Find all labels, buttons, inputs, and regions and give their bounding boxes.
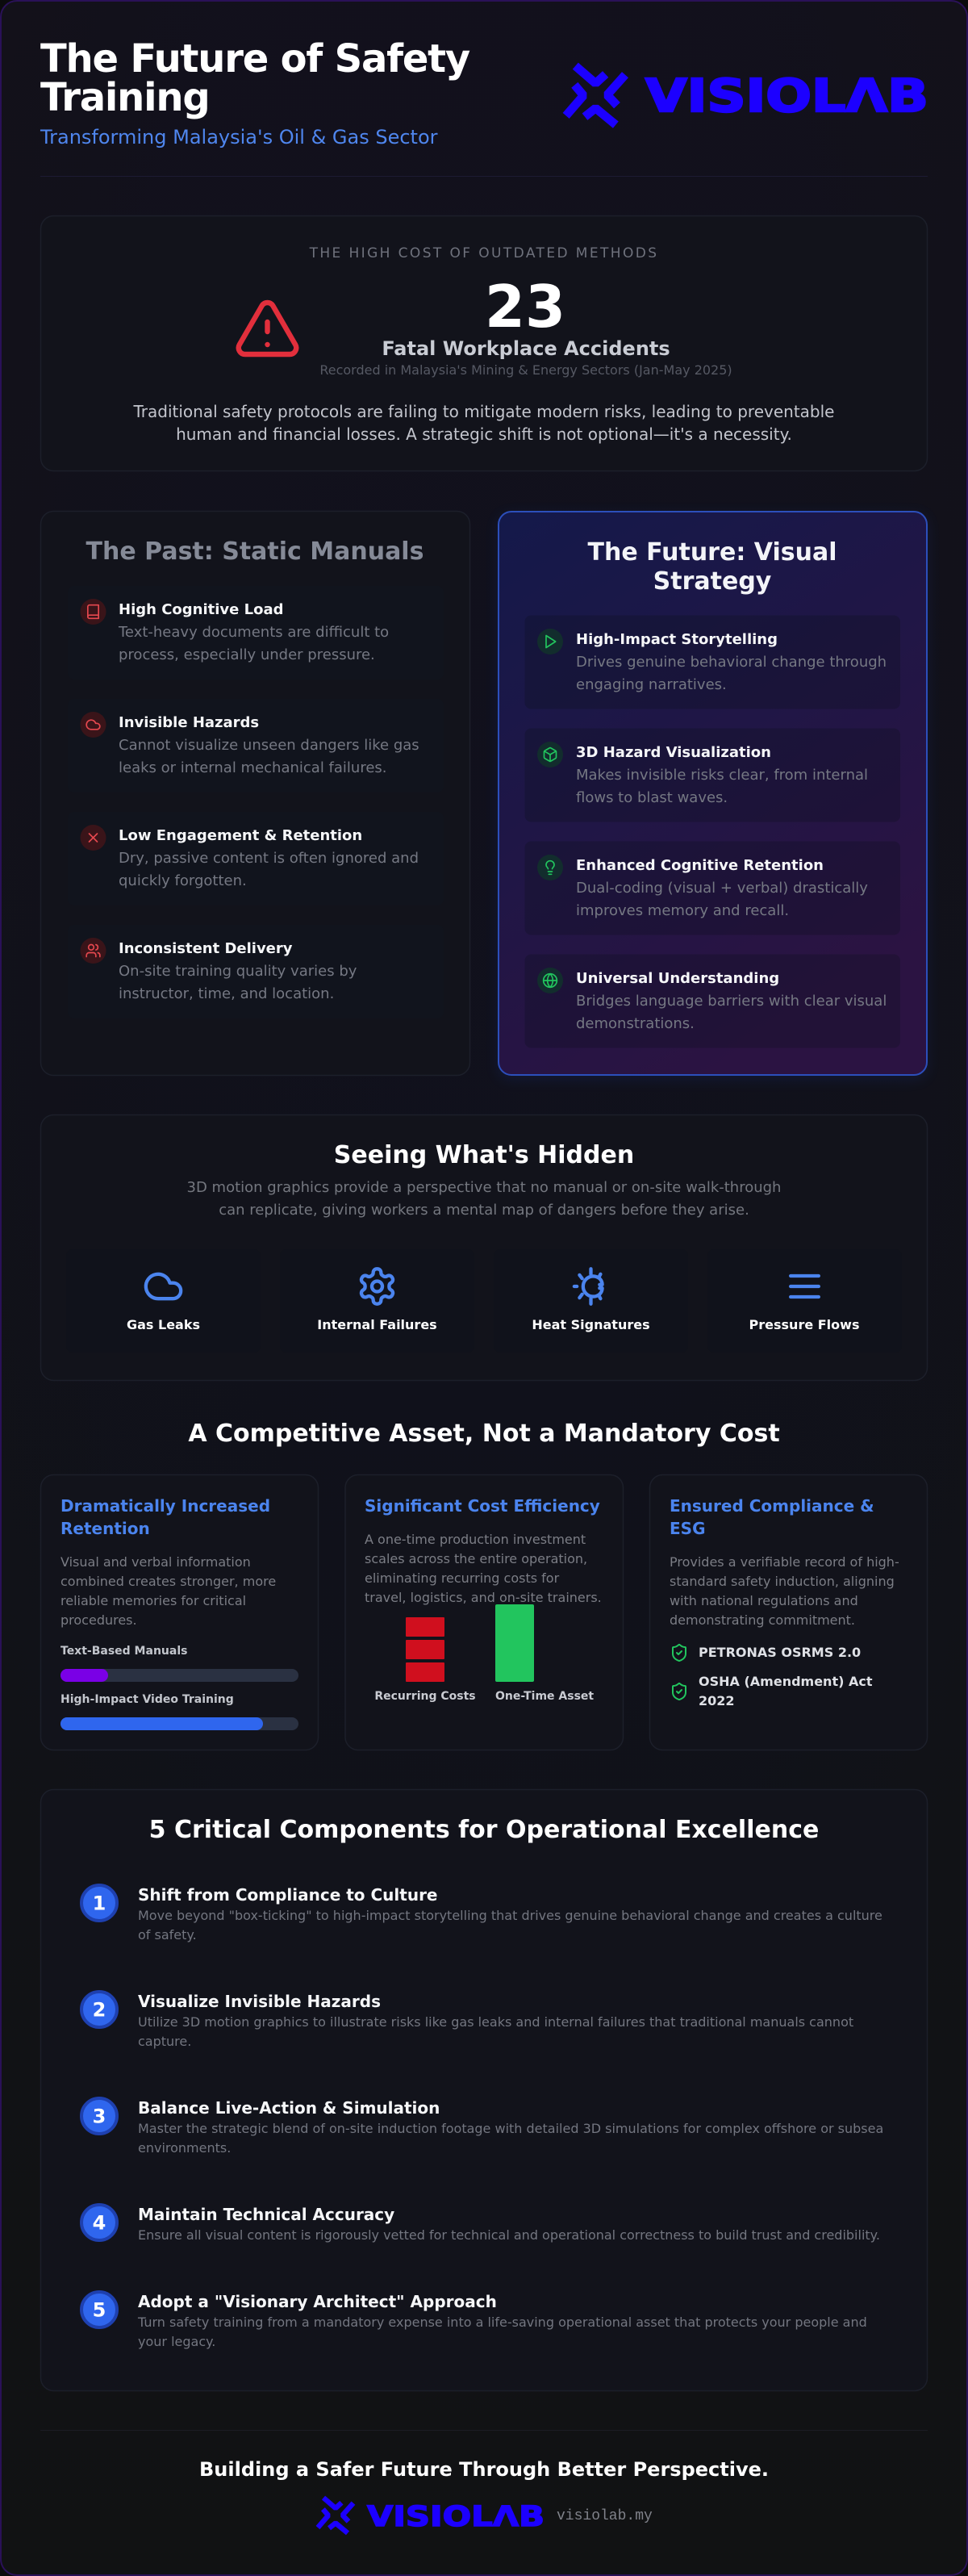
- component 4: [81, 2205, 880, 2243]
- description: Traditional safety protocols are failing to mitigate modern risks, leading to preventable: [133, 402, 834, 421]
- card text: reliable memories for critical: [60, 1593, 246, 1608]
- icon: warning triangle: [239, 303, 296, 354]
- tile: heat signatures: Heat Signatures: [532, 1317, 650, 1332]
- item: low engagement: [68, 812, 444, 905]
- comparison bars: High-Impact Video Training: [60, 1693, 234, 1706]
- item: high cognitive load: [68, 586, 444, 680]
- component 1: [81, 1885, 882, 1942]
- logo: Visiolab: [566, 66, 928, 125]
- description: 3D motion graphics provide a perspective that no manual or on-site walk-through: [187, 1179, 781, 1196]
- chart: recurring vs one-time cost: Recurring Costs: [374, 1690, 476, 1703]
- standard: osha act: 2022: [699, 1693, 735, 1708]
- item: invisible hazards: leaks or internal mechanical failures.: [119, 759, 387, 776]
- component 3: [81, 2098, 883, 2156]
- panel: 5 critical components: [40, 1790, 928, 2390]
- footer logo: [318, 2498, 544, 2533]
- item: inconsistent delivery: [68, 925, 444, 1018]
- item: low engagement: quickly forgotten.: [119, 872, 247, 889]
- footer tagline: Building a Safer Future Through Better Perspective.: [199, 2458, 769, 2481]
- component 5: your legacy.: [138, 2334, 215, 2349]
- standard: osha act: OSHA (Amendment) Act: [699, 1674, 873, 1689]
- item: high-impact storytelling: [524, 615, 900, 709]
- card heading: Dramatically Increased: [60, 1496, 270, 1516]
- panel: the past, static manuals: [40, 512, 469, 1075]
- item: high-impact storytelling: engaging narratives.: [576, 676, 727, 693]
- item: universal understanding: demonstrations.: [576, 1015, 695, 1032]
- item: inconsistent delivery: Inconsistent Delivery: [119, 940, 293, 957]
- component 2: Utilize 3D motion graphics to illustrate risks like gas leaks and internal failures that traditional manuals cannot: [138, 2014, 853, 2030]
- card heading: Ensured Compliance &: [670, 1496, 874, 1516]
- statistic: 23: 23: [485, 273, 565, 341]
- section heading: competitive asset: A Competitive Asset, Not a Mandatory Cost: [188, 1420, 780, 1448]
- header: [40, 36, 928, 148]
- card heading: ESG: [670, 1519, 705, 1538]
- item: enhanced cognitive retention: Dual-coding (visual + verbal) drastically: [576, 880, 868, 897]
- heading: 5 Critical Components for Operational Excellence: [149, 1816, 819, 1844]
- heading: The Past: Static Manuals: [86, 537, 424, 566]
- item: low engagement: Low Engagement & Retention: [119, 827, 362, 844]
- tile: gas leaks: Gas Leaks: [127, 1317, 200, 1332]
- card text: demonstrating commitment.: [670, 1612, 855, 1628]
- comparison bars: Text-Based Manuals: [60, 1645, 187, 1658]
- footer logo: VISIOLΛB: [367, 2501, 544, 2533]
- heading: Strategy: [653, 567, 772, 596]
- card text: scales across the entire operation,: [365, 1551, 587, 1566]
- card text: A one-time production investment: [365, 1532, 586, 1547]
- card text: Provides a verifiable record of high-: [670, 1554, 899, 1570]
- component 5: [81, 2292, 867, 2349]
- statistic source: Recorded in Malaysia's Mining & Energy Sectors (Jan-May 2025): [319, 362, 732, 378]
- card text: combined creates stronger, more: [60, 1574, 276, 1589]
- footer: [199, 2458, 769, 2533]
- card: dramatically increased retention: [40, 1475, 318, 1750]
- card: ensured compliance and ESG: [650, 1475, 928, 1750]
- title: The Future of Safety: [40, 36, 470, 82]
- component 3: Balance Live-Action & Simulation: [138, 2098, 440, 2118]
- statistic label: Fatal Workplace Accidents: [382, 337, 670, 360]
- item: high cognitive load: Text-heavy documents are difficult to: [118, 624, 389, 641]
- logo: Visiolab: VISIOLΛB: [645, 70, 928, 123]
- card: significant cost efficiency: [345, 1475, 623, 1750]
- standard: petronas osrms: PETRONAS OSRMS 2.0: [699, 1645, 861, 1660]
- item: 3d hazard visualization: 3D Hazard Visualization: [576, 744, 771, 761]
- card text: with national regulations and: [670, 1593, 858, 1608]
- tile: pressure flows: Pressure Flows: [749, 1317, 859, 1332]
- card text: standard safety induction, aligning: [670, 1574, 895, 1589]
- component 5: Adopt a "Visionary Architect" Approach: [138, 2292, 497, 2311]
- item: high-impact storytelling: Drives genuine behavioral change through: [576, 654, 887, 671]
- component 1: of safety.: [138, 1927, 197, 1942]
- heading: The Future: Visual: [588, 538, 837, 567]
- tile: pressure flows: [707, 1249, 902, 1353]
- item: high cognitive load: process, especially under pressure.: [119, 646, 375, 663]
- heading: Seeing What's Hidden: [334, 1141, 634, 1169]
- item: 3d hazard visualization: [524, 728, 900, 822]
- component 2: [81, 1992, 853, 2049]
- item: inconsistent delivery: instructor, time, and location.: [119, 985, 334, 1002]
- standard: osha act: [673, 1674, 873, 1708]
- item: universal understanding: [524, 954, 900, 1048]
- component 2: Visualize Invisible Hazards: [138, 1992, 381, 2011]
- item: enhanced cognitive retention: improves memory and recall.: [576, 902, 789, 919]
- panel: the future, visual strategy: [498, 512, 928, 1080]
- chart: recurring vs one-time cost: One-Time Asset: [495, 1690, 594, 1703]
- comparison bars: [60, 1645, 298, 1730]
- item: high cognitive load: High Cognitive Load: [119, 601, 284, 618]
- tile: gas leaks: [66, 1249, 261, 1353]
- tile: internal failures: Internal Failures: [317, 1317, 437, 1332]
- item: enhanced cognitive retention: [524, 841, 900, 935]
- description: can replicate, giving workers a mental map of dangers before they arise.: [219, 1202, 749, 1219]
- item: enhanced cognitive retention: Enhanced Cognitive Retention: [576, 857, 824, 874]
- tile: heat signatures: [494, 1249, 688, 1353]
- component 4: Ensure all visual content is rigorously vetted for technical and operational correctness to build trust and credibility.: [138, 2227, 880, 2243]
- component 3: 3: [93, 2105, 106, 2127]
- component 5: Turn safety training from a mandatory expense into a life-saving operational asset that protects your people and: [137, 2315, 867, 2330]
- chart: recurring vs one-time cost: [374, 1604, 594, 1703]
- component 2: 2: [93, 1998, 106, 2021]
- item: 3d hazard visualization: Makes invisible risks clear, from internal: [576, 767, 868, 784]
- card text: eliminating recurring costs for: [365, 1570, 560, 1586]
- component 4: 4: [93, 2211, 106, 2234]
- item: invisible hazards: Cannot visualize unseen dangers like gas: [119, 737, 419, 754]
- component 3: environments.: [138, 2140, 231, 2156]
- description: human and financial losses. A strategic shift is not optional—it's a necessity.: [176, 424, 792, 444]
- card text: Visual and verbal information: [60, 1554, 251, 1570]
- footer website: visiolab.my: [557, 2508, 653, 2524]
- item: inconsistent delivery: On-site training quality varies by: [119, 963, 357, 980]
- item: high-impact storytelling: High-Impact Storytelling: [576, 631, 778, 648]
- subtitle: Transforming Malaysia's Oil & Gas Sector: [40, 126, 438, 148]
- component 1: 1: [93, 1892, 106, 1914]
- component 5: 5: [93, 2298, 106, 2321]
- component 1: Move beyond "box-ticking" to high-impact storytelling that drives genuine behavioral change and creates a culture: [138, 1908, 882, 1923]
- card text: procedures.: [60, 1612, 137, 1628]
- panel: seeing what's hidden: [40, 1115, 928, 1380]
- item: universal understanding: Universal Understanding: [576, 970, 779, 987]
- item: invisible hazards: [68, 699, 444, 792]
- item: 3d hazard visualization: flows to blast waves.: [576, 789, 728, 806]
- component 2: capture.: [138, 2034, 191, 2049]
- component 4: Maintain Technical Accuracy: [138, 2205, 394, 2224]
- card heading: Retention: [60, 1519, 150, 1538]
- item: low engagement: Dry, passive content is often ignored and: [119, 850, 419, 867]
- item: universal understanding: Bridges language barriers with clear visual: [576, 993, 887, 1010]
- tile: internal failures: [280, 1249, 474, 1353]
- card heading: Significant Cost Efficiency: [365, 1496, 600, 1516]
- title: Training: [40, 75, 210, 120]
- card text: travel, logistics, and on-site trainers.: [365, 1590, 602, 1605]
- panel: high cost of outdated methods: [40, 216, 928, 471]
- component 3: Master the strategic blend of on-site induction footage with detailed 3D simulations for complex offshore or subsea: [138, 2121, 883, 2136]
- item: invisible hazards: Invisible Hazards: [119, 714, 259, 731]
- component 1: Shift from Compliance to Culture: [138, 1885, 437, 1905]
- panel label: THE HIGH COST OF OUTDATED METHODS: [309, 245, 658, 261]
